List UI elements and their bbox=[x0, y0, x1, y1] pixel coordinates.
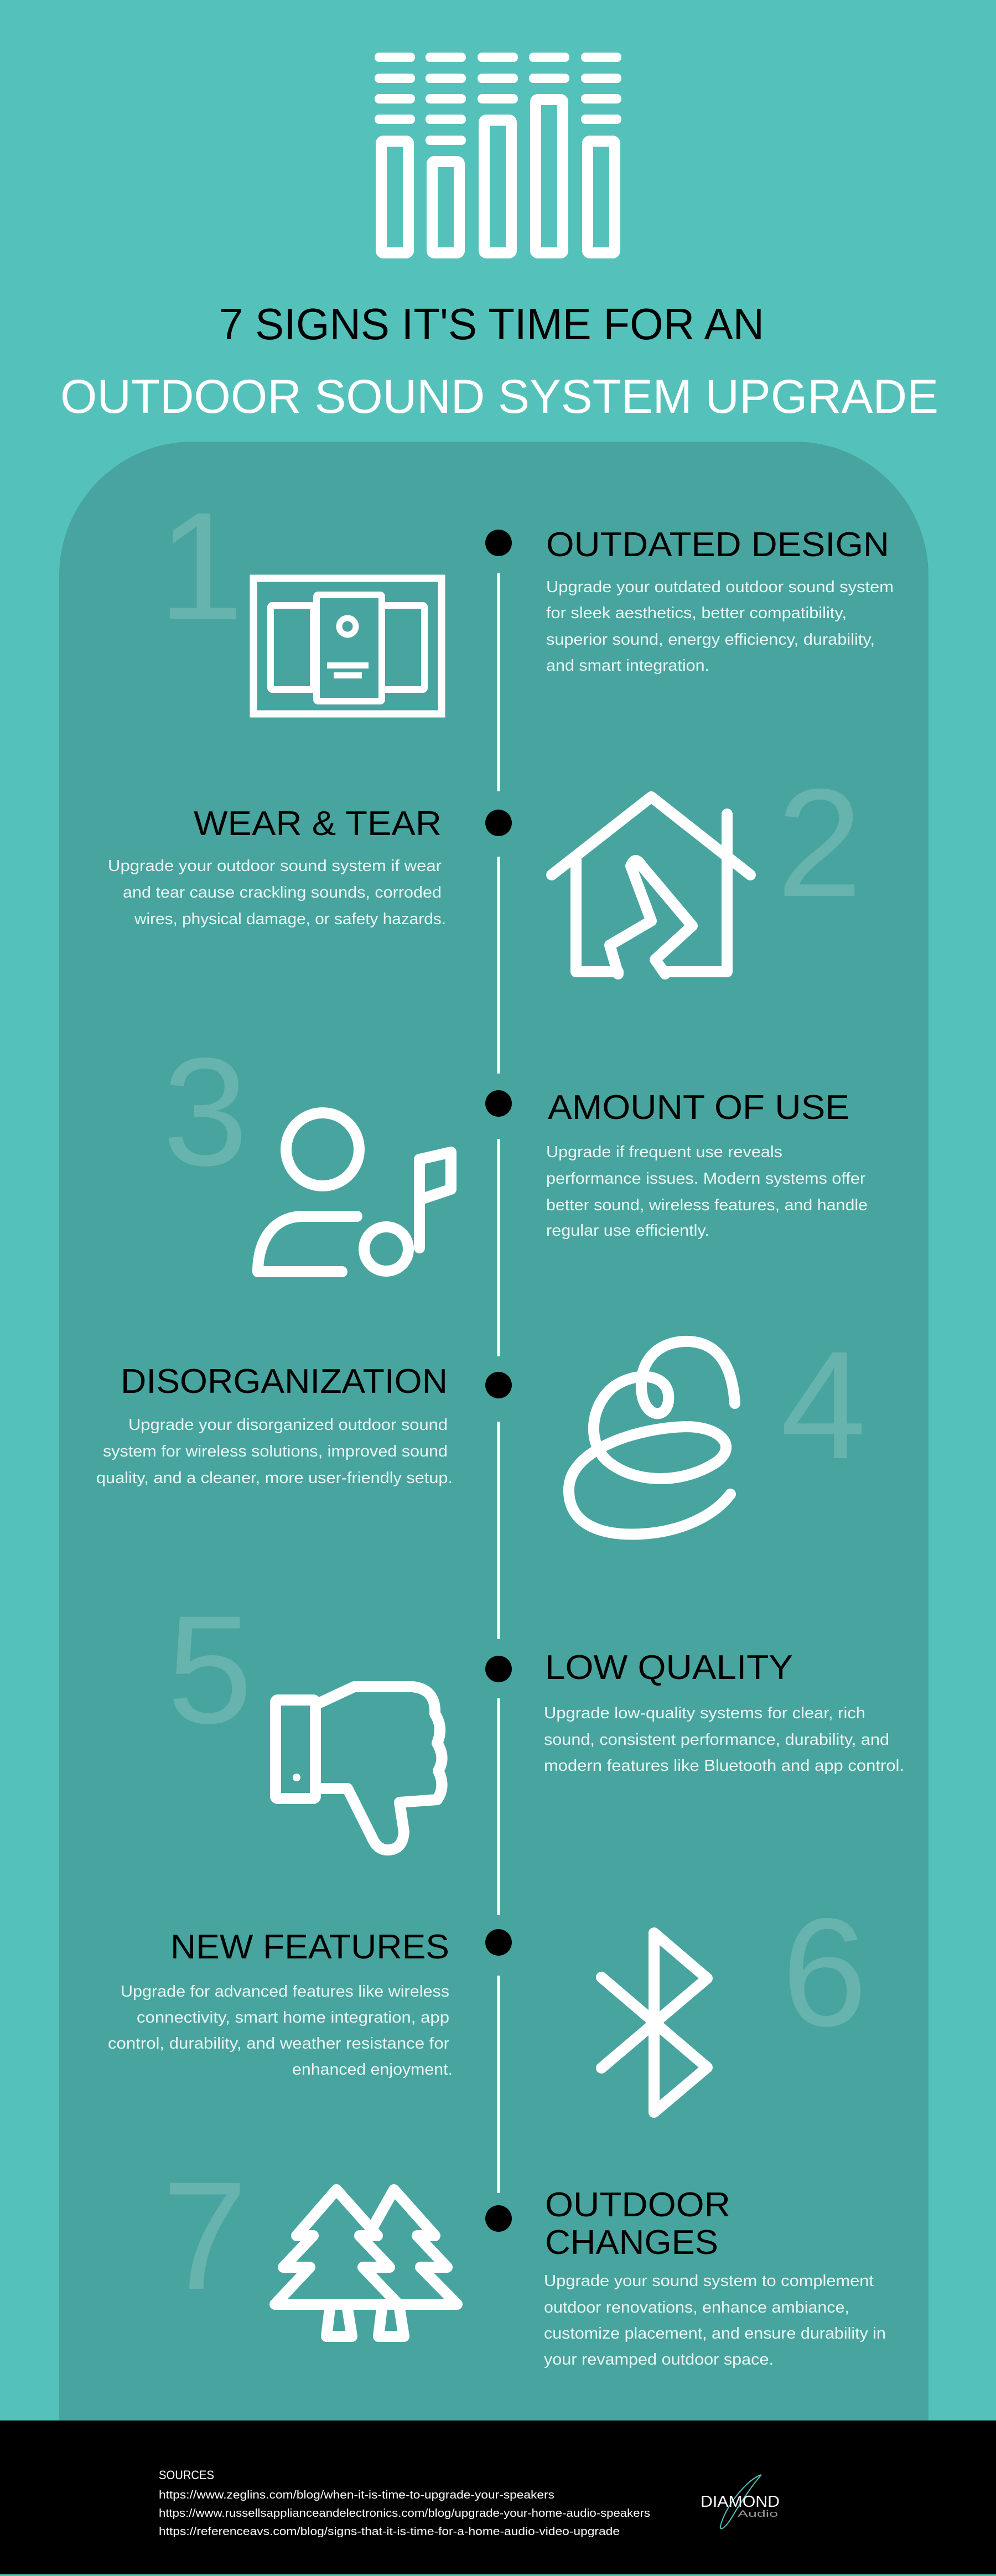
section 5: low quality bbox=[167, 1583, 904, 1850]
panel: timeline bbox=[59, 442, 928, 2420]
section 4: disorganization bbox=[96, 1319, 866, 1535]
section 6: new features: enhanced enjoyment. bbox=[292, 2061, 453, 2079]
sources: SOURCES bbox=[159, 2468, 214, 2482]
sources: https://referenceavs.com/blog/signs-that-it-is-time-for-a-home-audio-video-upgrade bbox=[159, 2526, 620, 2538]
section 4: disorganization: DISORGANIZATION bbox=[121, 1362, 448, 1401]
section 6: new features: connectivity, smart home integration, app bbox=[137, 2009, 449, 2026]
section 2: wear & tear: and tear cause crackling sounds, corroded bbox=[123, 884, 442, 901]
section 7: outdoor changes: 7 bbox=[162, 2149, 247, 2321]
section 5: low quality: modern features like Bluetooth and app control. bbox=[544, 1757, 904, 1775]
section 6: new features: Upgrade for advanced features like wireless bbox=[121, 1983, 449, 2000]
section 3: amount of use: Upgrade if frequent use reveals bbox=[546, 1143, 782, 1161]
section 4: disorganization: Upgrade your disorganized outdoor sound bbox=[128, 1416, 448, 1434]
icon: bluetooth bbox=[601, 1933, 707, 2112]
section 3: amount of use: 3 bbox=[163, 1025, 248, 1198]
section 1: outdated design: superior sound, energy efficiency, durability, bbox=[546, 631, 875, 649]
section 3: amount of use: regular use efficiently. bbox=[546, 1222, 709, 1240]
section 7: outdoor changes bbox=[162, 2149, 886, 2368]
sources: https://www.russellsapplianceandelectronics.com/blog/upgrade-your-home-audio-speakers bbox=[159, 2507, 650, 2520]
section 7: outdoor changes: customize placement, and ensure durability in bbox=[544, 2325, 886, 2342]
section 7: outdoor changes: outdoor renovations, enhance ambiance, bbox=[544, 2299, 849, 2316]
footer bbox=[0, 2420, 996, 2576]
title: OUTDOOR SOUND SYSTEM UPGRADE bbox=[60, 370, 938, 423]
section 7: outdoor changes: Upgrade your sound system to complement bbox=[544, 2272, 874, 2290]
section 3: amount of use: AMOUNT OF USE bbox=[548, 1089, 849, 1127]
section 4: disorganization: system for wireless solutions, improved sound bbox=[103, 1443, 448, 1460]
section 1: outdated design: for sleek aesthetics, better compatibility, bbox=[546, 604, 847, 622]
section 6: new features bbox=[108, 1886, 867, 2112]
section 6: new features: control, durability, and weather resistance for bbox=[108, 2035, 449, 2052]
section 4: disorganization: 4 bbox=[781, 1319, 866, 1491]
section 6: new features: 6 bbox=[782, 1886, 867, 2058]
section 6: new features: NEW FEATURES bbox=[170, 1928, 449, 1966]
section 2: wear & tear: 2 bbox=[777, 756, 862, 929]
section 2: wear & tear: wires, physical damage, or safety hazards. bbox=[134, 910, 446, 928]
section 5: low quality: sound, consistent performance, durability, and bbox=[544, 1731, 889, 1749]
section 5: low quality: LOW QUALITY bbox=[545, 1649, 793, 1687]
section 7: outdoor changes: CHANGES bbox=[545, 2223, 718, 2262]
section 3: amount of use: better sound, wireless features, and handle bbox=[546, 1196, 868, 1214]
section 1: outdated design: OUTDATED DESIGN bbox=[546, 526, 889, 564]
icon: person with music note bbox=[258, 1113, 451, 1272]
icon: broken house bbox=[552, 797, 750, 974]
title: 7 SIGNS IT'S TIME FOR AN bbox=[219, 299, 764, 349]
sources: https://www.zeglins.com/blog/when-it-is-time-to-upgrade-your-speakers bbox=[159, 2489, 554, 2501]
section 3: amount of use bbox=[163, 1025, 868, 1272]
icon: equalizer bbox=[375, 53, 621, 253]
section 2: wear & tear: Upgrade your outdoor sound system if wear bbox=[108, 857, 442, 875]
section 5: low quality: 5 bbox=[167, 1583, 252, 1755]
logo: diamond audio bbox=[701, 2475, 780, 2528]
section 2: wear & tear bbox=[108, 756, 862, 974]
section 1: outdated design: Upgrade your outdated outdoor sound system bbox=[546, 578, 894, 596]
logo: diamond audio: DIAMOND bbox=[701, 2493, 780, 2511]
icon: speaker system bbox=[253, 578, 442, 714]
section 1: outdated design: and smart integration. bbox=[546, 657, 709, 675]
section 7: outdoor changes: your revamped outdoor space. bbox=[544, 2351, 774, 2368]
icon: thumbs down bbox=[276, 1687, 442, 1850]
section 1: outdated design: 1 bbox=[158, 480, 243, 652]
title bbox=[60, 299, 938, 423]
icon: pine trees bbox=[275, 2190, 457, 2336]
section 2: wear & tear: WEAR & TEAR bbox=[194, 805, 442, 843]
section 5: low quality: Upgrade low-quality systems for clear, rich bbox=[544, 1704, 865, 1722]
icon: tangled cable bbox=[569, 1341, 735, 1535]
section 4: disorganization: quality, and a cleaner, more user-friendly setup. bbox=[96, 1469, 453, 1487]
sources bbox=[159, 2468, 650, 2538]
section 7: outdoor changes: OUTDOOR bbox=[545, 2186, 730, 2224]
logo: diamond audio: Audio bbox=[738, 2508, 778, 2519]
section 1: outdated design bbox=[158, 480, 894, 714]
section 3: amount of use: performance issues. Modern systems offer bbox=[546, 1170, 865, 1188]
